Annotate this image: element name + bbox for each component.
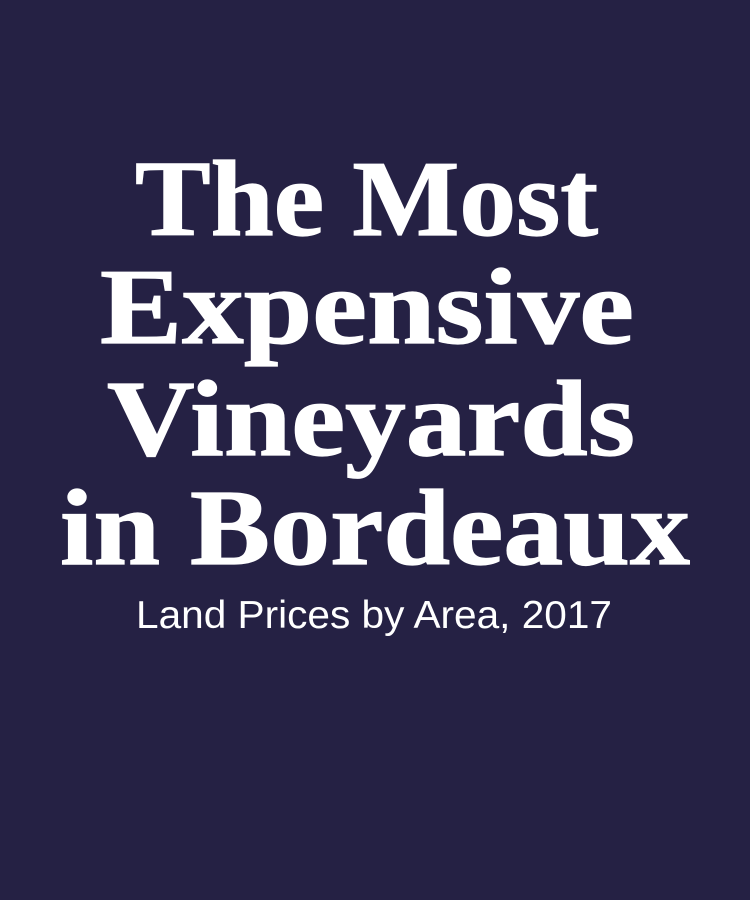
title: Expensive: [100, 248, 634, 367]
subtitle: Land Prices by Area, 2017: [136, 594, 612, 637]
title: in Bordeaux: [60, 469, 690, 588]
title: [60, 140, 690, 588]
title: The Most: [135, 140, 598, 259]
title: Vineyards: [107, 360, 635, 479]
